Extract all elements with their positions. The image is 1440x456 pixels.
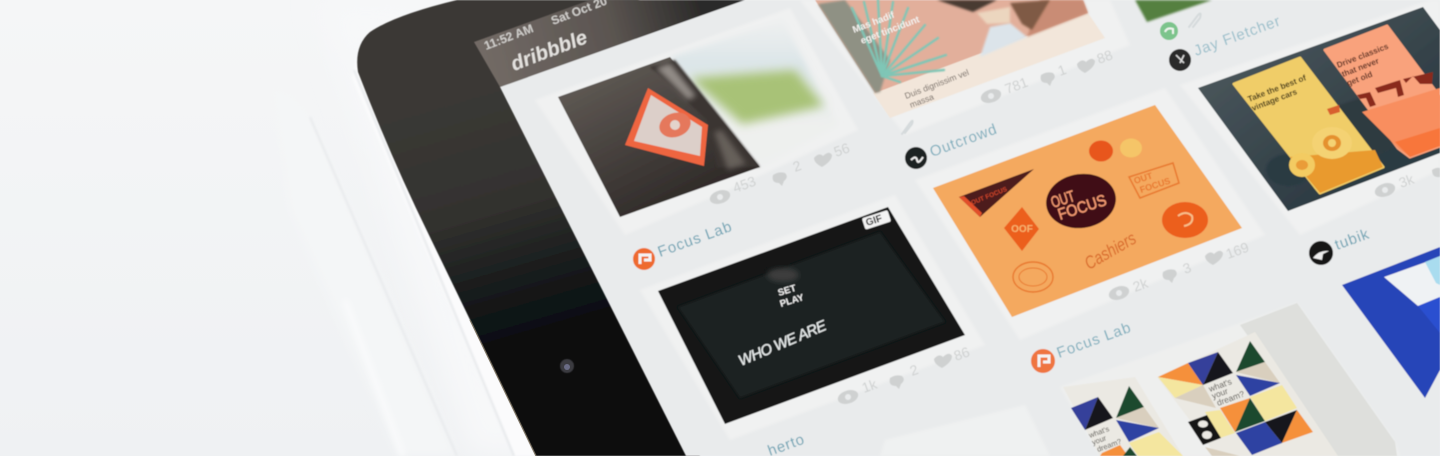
main OUT FOCUS badge: FOCUS [1056,192,1109,224]
tablet bezel [357,0,700,456]
green author avatar [1160,22,1178,40]
diamond sticker [1004,207,1039,251]
main OUT FOCUS badge [1043,169,1119,233]
dark fabric [558,57,760,217]
card: vintage car phone mockups [1180,0,1440,235]
photo headline: Mas hadif [851,10,897,36]
title: SET PLAY: SET [777,283,798,299]
bezel brass edge line [470,320,536,456]
tablet silver edge [352,58,545,456]
red diamond patch [625,88,708,166]
stats [1373,168,1440,199]
card: pink photo and palm leaf [800,0,1130,135]
GIF badge: GIF [865,213,884,229]
author: Jay Fletcher [1169,13,1283,71]
stylus [271,70,457,456]
stats: 56 [832,139,852,160]
pennant sticker [959,169,1034,217]
status and navigation bar [474,0,745,87]
status bar time: 11:52 AM [482,21,535,53]
paperclip icon [902,121,913,134]
orange round badge [1162,202,1208,238]
pennant sticker: OUT FOCUS [970,186,1009,207]
screen background [500,0,1440,456]
shirt [980,23,1027,57]
small poster: your [1091,433,1108,447]
large poster: what's [1206,376,1233,394]
large poster: your [1210,386,1229,401]
author: Focus Lab (second) [1031,319,1134,373]
author: Outcrowd [905,121,1000,169]
author: Jay Fletcher: Jay Fletcher [1192,13,1283,60]
yellow phone: Take the best of [1246,73,1308,104]
stats [1107,239,1251,302]
outlined OUT FOCUS stamp [1129,163,1179,198]
title: WHO WE ARE: WHO WE ARE [736,317,830,370]
author: Focus Lab (first): Focus Lab [656,218,735,261]
small poster [1063,377,1183,456]
stats: 3k [1397,170,1417,191]
author: tubik [1309,226,1372,265]
front camera [560,359,574,373]
card: pink photo and palm leaf: massa [908,91,935,110]
stats: 3 [1181,259,1194,277]
green hillside [690,70,824,124]
peach footer [873,13,1105,118]
desk area right of the stylus [320,0,540,456]
hair [937,0,997,12]
card: blue interface shot [1342,247,1440,398]
stats: 2 [791,157,804,175]
stats [708,139,852,206]
card: video shot with GIF badge [640,195,985,440]
grey leaf shade [818,0,890,93]
stats: 453 [731,173,758,196]
card: video shot with GIF badge: PLAY [779,292,806,310]
GIF badge [862,210,891,230]
fur edge [650,60,760,167]
main OUT FOCUS badge: OUT [1049,188,1077,212]
screen contents [474,0,1440,456]
diamond sticker: OOF [1011,224,1033,235]
stats: 88 [1095,46,1115,67]
large poster [1157,332,1338,456]
skin photo [815,0,1088,93]
palm leaf [852,0,946,82]
outlined OUT FOCUS stamp: FOCUS [1139,176,1172,195]
stats: 86 [952,343,972,364]
green shot fragment [1135,0,1212,22]
large poster: dream? [1215,389,1246,408]
stats: 2k [1131,274,1151,295]
stats: 1 [1056,61,1069,79]
yellow phone: vintage cars [1250,87,1299,113]
outlined round stamp [1013,262,1053,292]
card: geometric posters [1060,303,1400,456]
card: pink photo and palm leaf: eget tincidunt [859,14,922,47]
stats: 169 [1224,239,1251,262]
grey backdrop [1240,303,1397,456]
small poster: dream? [1096,437,1123,454]
author: Focus Lab (first) [633,218,735,270]
orange phone: Drive classics [1335,42,1390,70]
caption: Duis dignissim vel [903,67,970,101]
small poster: what's [1087,424,1111,440]
stats [836,343,972,406]
pale blurred photo background [670,20,838,167]
stats [979,46,1115,105]
orange phone: that never [1340,56,1381,79]
red round sticker [1089,140,1113,162]
Cashiers script: Cashiers [1081,228,1139,273]
card: orange sticker sheet [915,88,1265,340]
stats: 781 [1003,74,1030,97]
author: Focus Lab (second): Focus Lab [1055,319,1134,362]
orange phone [1325,26,1440,157]
outlined OUT FOCUS stamp: OUT [1133,170,1154,186]
card placeholder below video [880,405,1050,456]
paperclip icon [1189,14,1201,27]
yellow phone [1234,58,1383,193]
strap [1010,0,1050,30]
author: tubik: tubik [1333,226,1372,254]
yellow round sticker [1120,138,1142,158]
stats: 1k [860,375,880,396]
car silhouette behind phones [1330,85,1440,155]
author: Outcrowd: Outcrowd [928,121,1000,161]
dribbble wordmark: dribbble [508,26,590,76]
card: patch shot [535,8,858,235]
orange phone: get old [1345,70,1374,88]
neck [977,7,1010,24]
stats: 2 [908,361,921,379]
